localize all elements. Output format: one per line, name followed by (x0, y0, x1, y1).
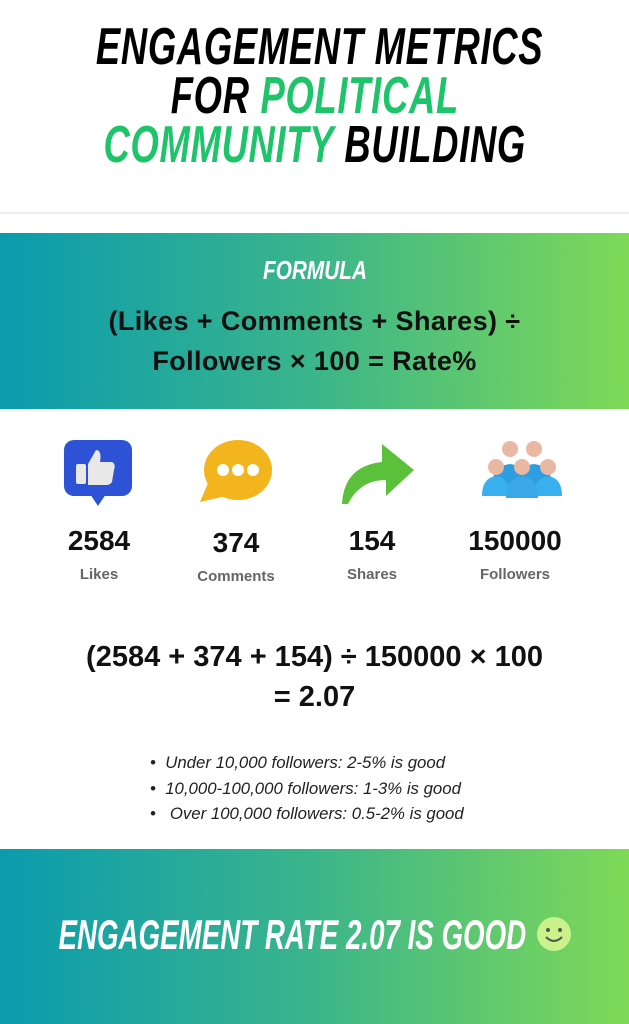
icon: comments (200, 440, 272, 502)
icon: shares (342, 444, 414, 504)
stat: shares: Shares (347, 566, 397, 583)
calculation: = 2.07 (274, 681, 355, 713)
calculation (86, 641, 543, 713)
stat: followers: 150000 (468, 525, 562, 556)
formula text: (Likes + Comments + Shares) ÷ (108, 306, 521, 336)
result text: ENGAGEMENT RATE 2.07 IS GOOD (58, 911, 526, 958)
stat: likes (68, 525, 130, 583)
calculation: (2584 + 374 + 154) ÷ 150000 × 100 (86, 641, 543, 673)
stat: comments: Comments (197, 568, 275, 585)
title: FOR POLITICAL (170, 67, 459, 125)
panel: result (0, 849, 629, 1024)
stat: comments (197, 527, 275, 585)
benchmarks list: • 10,000-100,000 followers: 1-3% is good (150, 778, 461, 798)
stat: followers: Followers (480, 566, 550, 583)
stat: likes: 2584 (68, 525, 130, 556)
stat: likes: Likes (80, 566, 118, 583)
title (96, 18, 543, 174)
stat: shares: 154 (349, 525, 395, 556)
stat: comments: 374 (213, 527, 259, 558)
icon: followers (482, 441, 562, 498)
icon: smiley (537, 917, 571, 951)
formula heading: FORMULA (262, 255, 366, 285)
formula text (108, 306, 521, 376)
panel: formula (0, 233, 629, 409)
icon: likes (64, 440, 132, 506)
stat: followers (468, 525, 562, 583)
benchmarks list: • Under 10,000 followers: 2-5% is good (150, 753, 445, 772)
benchmarks list (150, 753, 464, 823)
formula text: Followers × 100 = Rate% (152, 346, 477, 376)
title: COMMUNITY BUILDING (103, 116, 526, 174)
benchmarks list: • Over 100,000 followers: 0.5-2% is good (150, 804, 464, 823)
stat: shares (347, 525, 397, 583)
title: ENGAGEMENT METRICS (96, 18, 543, 76)
